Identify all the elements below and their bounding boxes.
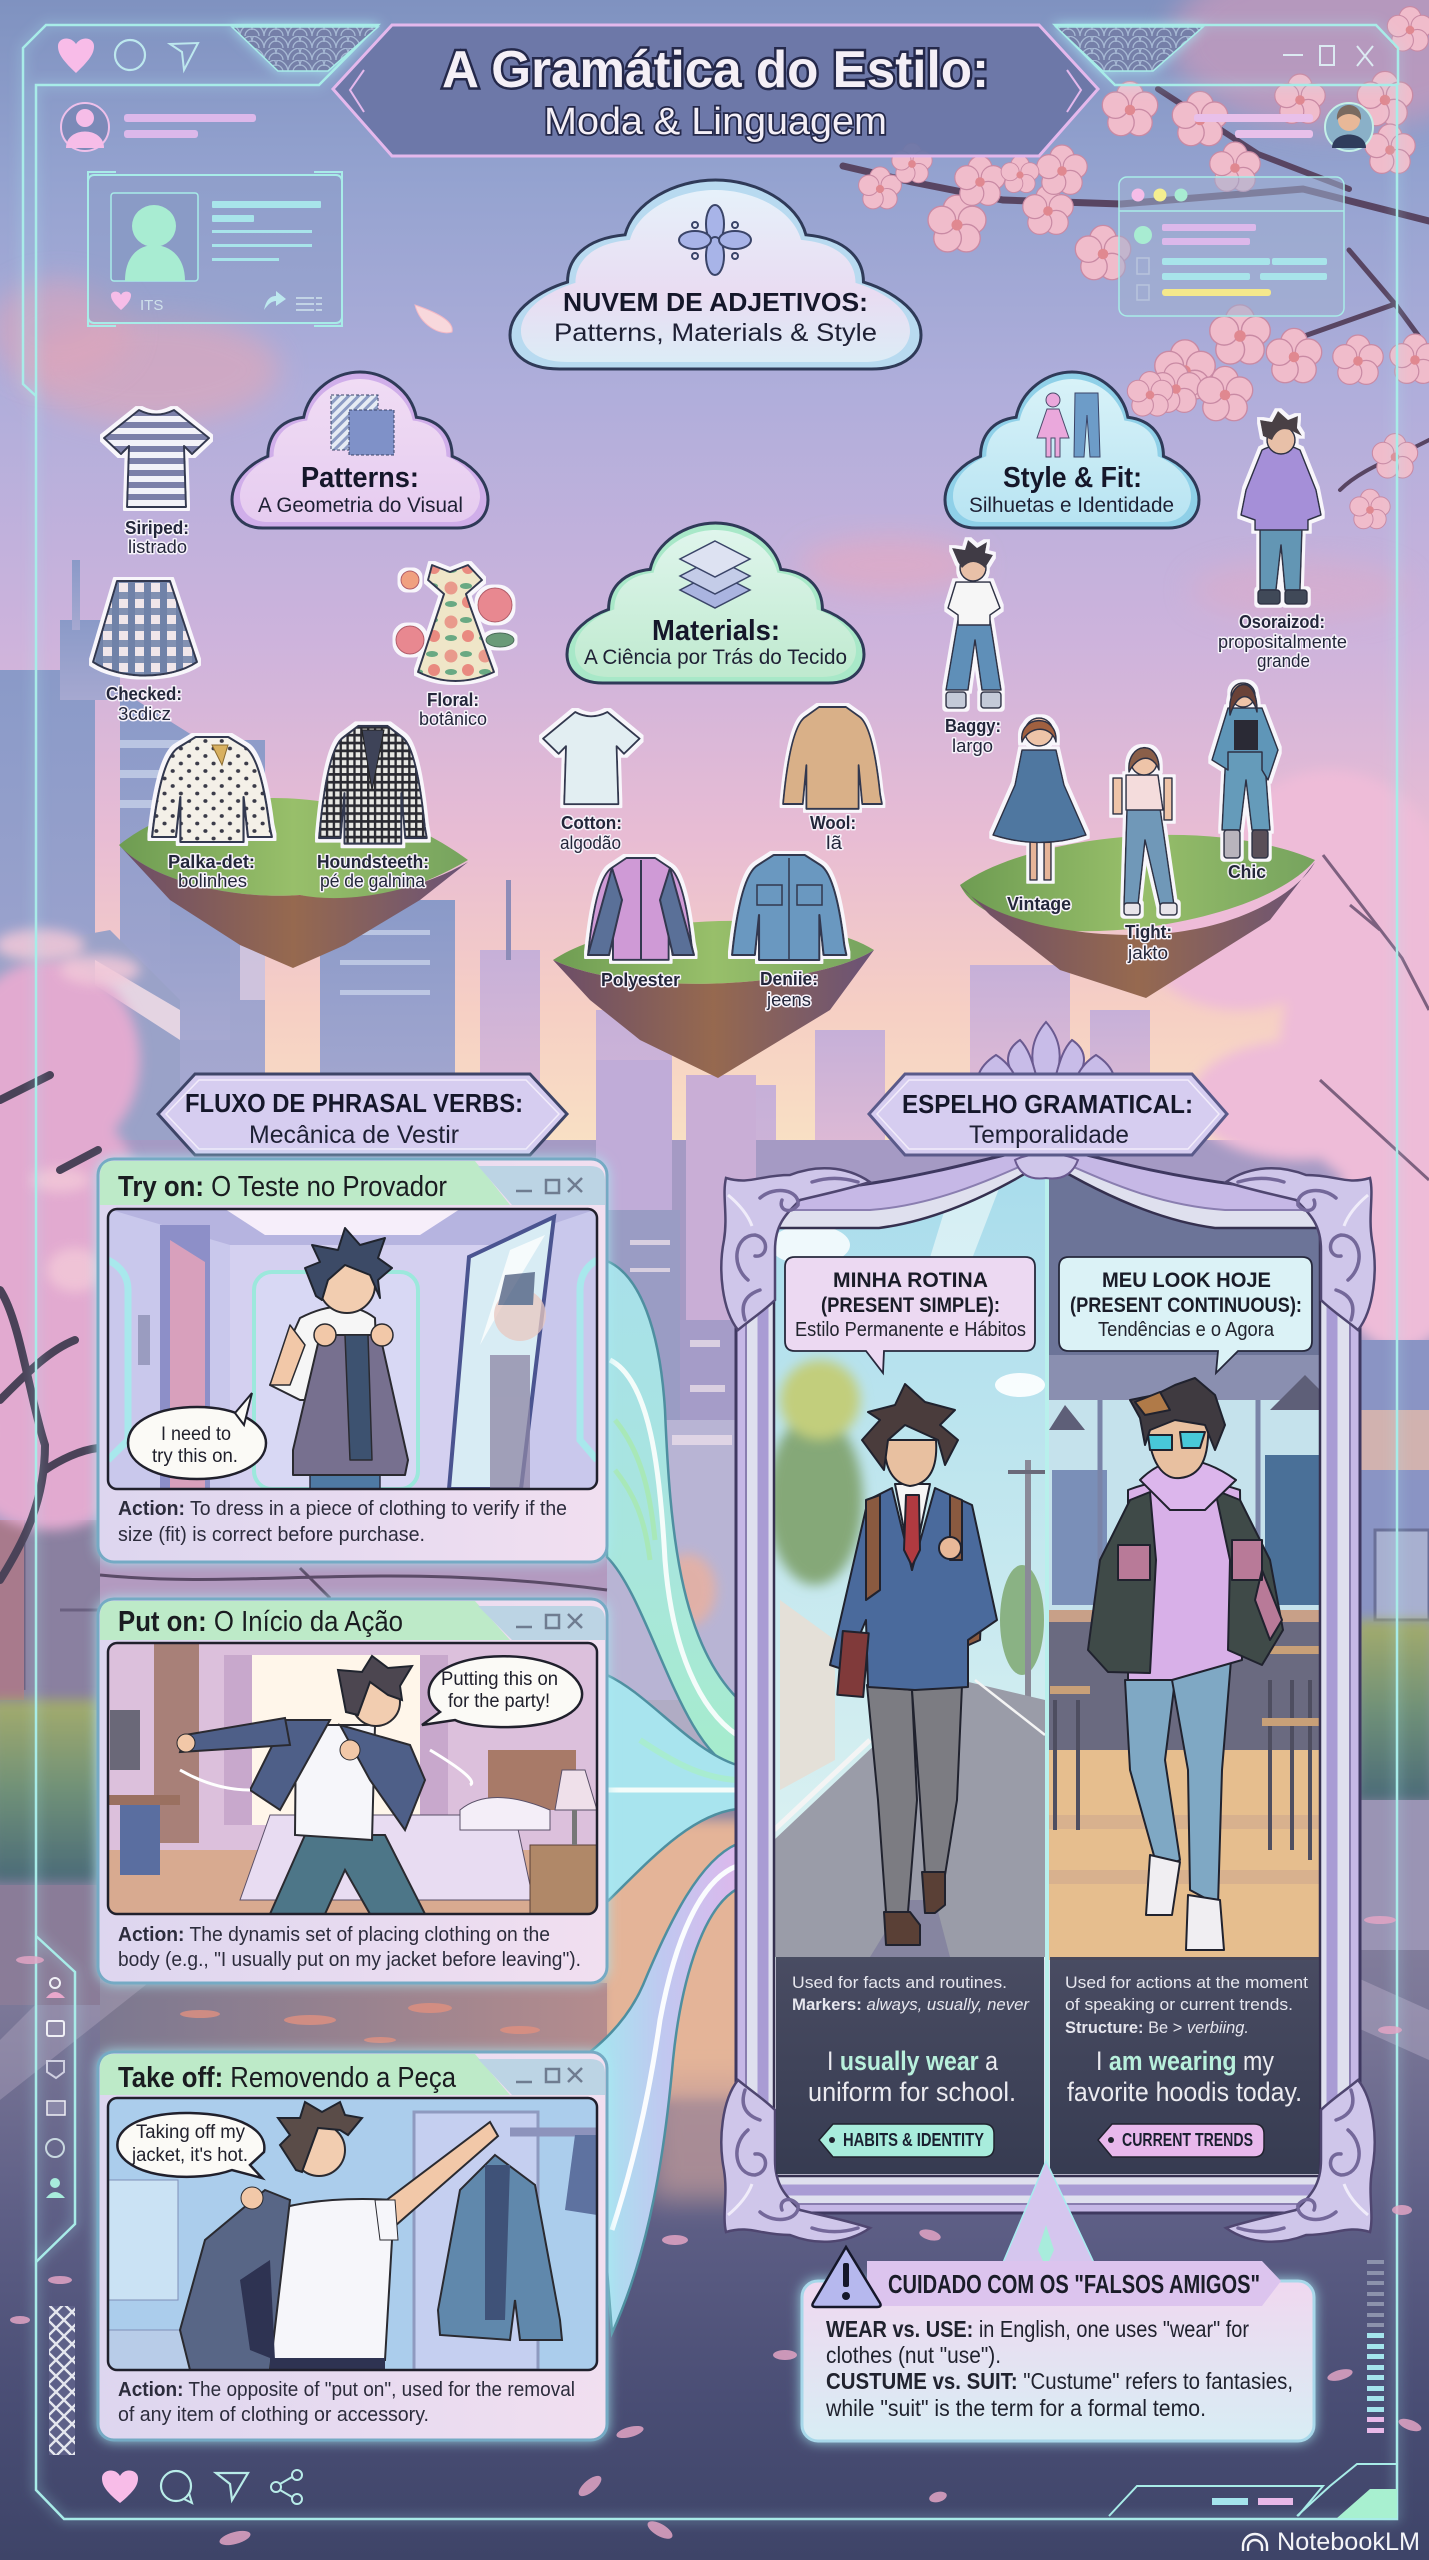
mirror body — [736, 1145, 1360, 2213]
near city left — [0, 560, 455, 1170]
figure: oversized: Osoraizod: — [1239, 612, 1325, 632]
figure: vintage — [993, 718, 1086, 914]
right cherry tree — [1150, 770, 1429, 1950]
character — [270, 1228, 408, 1490]
subtitle text: Moda & Linguagem — [544, 101, 887, 143]
panel: take off: Take off: Removendo a Peça — [118, 2062, 457, 2094]
figure: oversized: grande — [1257, 651, 1310, 671]
heading: fluxo de phrasal verbs: Mecânica de Vestir — [249, 1121, 459, 1149]
garment: striped tee — [104, 410, 209, 557]
panel: present continuous explanation: favorite hoodis today. — [1067, 2077, 1302, 2107]
garment: denim jacket: Deniie: — [760, 969, 818, 989]
bottom icons: heart, comment, send, share — [102, 2470, 302, 2504]
callout: minha rotina: Estilo Permanente e Hábitos — [795, 1319, 1026, 1341]
signal bar right — [1367, 2260, 1384, 2433]
figure: baggy — [945, 540, 1001, 756]
panel: put on: Put on: O Início da Ação — [118, 1606, 403, 1638]
garment: polka-dot blouse: bolinhes — [178, 871, 247, 891]
figure: tight: Tight: — [1125, 922, 1172, 942]
crest under heading — [1015, 1154, 1078, 1178]
panel: present continuous explanation: of speaking or current trends. — [1065, 1995, 1293, 2014]
garment: wool sweater — [783, 707, 882, 853]
character: trendy boy — [1088, 1378, 1283, 1950]
callout: meu look hoje: (PRESENT CONTINUOUS): — [1070, 1294, 1302, 1317]
garment: checked skirt: 3cdicz — [118, 704, 171, 724]
status widget right — [1119, 177, 1344, 316]
heading: fluxo de phrasal verbs — [158, 1074, 567, 1155]
left mirror scene: street — [767, 1160, 1046, 1960]
speech bubble — [422, 1656, 582, 1727]
garment: striped tee: listrado — [128, 537, 187, 557]
garment: wool sweater: Wool: — [810, 813, 856, 833]
garment: floral dress — [396, 565, 514, 729]
cloud: materials: Materials: — [652, 615, 780, 647]
panel: try on: Action: To dress in a piece of clothing to verify if the — [118, 1498, 567, 1520]
garment: cotton tee: algodão — [560, 833, 621, 853]
heading: espelho gramatical: Temporalidade — [969, 1121, 1129, 1149]
cloud: materials: A Ciência por Trás do Tecido — [584, 646, 847, 669]
panel: present continuous explanation: I am wearing my — [1096, 2046, 1274, 2076]
panel: put on: body (e.g., "I usually put on my jacket before leaving"). — [118, 1949, 581, 1971]
decorative pattern strip — [49, 2306, 75, 2455]
heading: espelho gramatical: ESPELHO GRAMATICAL: — [902, 1089, 1193, 1119]
speech bubble: Putting this on — [441, 1669, 558, 1690]
figure: vintage: Vintage — [1007, 894, 1071, 914]
cloud: style and fit — [945, 372, 1199, 528]
card widget left — [88, 172, 342, 326]
callout: minha rotina — [785, 1257, 1035, 1373]
speech bubble: for the party! — [448, 1691, 550, 1712]
left side tool strip — [36, 1936, 75, 2262]
avatar — [111, 193, 198, 281]
crown ornament — [978, 1022, 1114, 1076]
figure: tight: jakto — [1127, 943, 1168, 963]
cherry branch top right — [843, 7, 1429, 529]
cloud: patterns — [232, 372, 488, 528]
cloud: patterns: Patterns: — [301, 462, 419, 494]
character: school boy — [830, 1384, 997, 1945]
mirror frame — [721, 1022, 1375, 2242]
corner decoration bottom right — [1109, 2464, 1397, 2518]
warning panel: falsos amigos: CUIDADO COM OS "FALSOS AMIGOS" — [888, 2269, 1260, 2299]
title banner — [333, 25, 1098, 156]
garment: polka-dot blouse — [152, 737, 272, 891]
floating island: style — [960, 835, 1315, 998]
panel: take off — [98, 2052, 607, 2440]
tag: habits and identity — [819, 2124, 994, 2157]
callout: minha rotina: MINHA ROTINA — [833, 1269, 988, 1292]
speech bubble: jacket, it's hot. — [131, 2145, 248, 2166]
profile left — [61, 103, 256, 151]
divider — [1045, 1161, 1049, 2181]
heading: espelho gramatical — [869, 1074, 1227, 1155]
garment: cotton tee: Cotton: — [561, 813, 622, 833]
left cherry tree — [0, 929, 140, 2005]
corner ornaments — [721, 1168, 1375, 2242]
garment: polyester jacket — [588, 858, 694, 990]
hanging jacket — [438, 2155, 562, 2340]
cloud: nuvem de adjetivos: NUVEM DE ADJETIVOS: — [563, 287, 868, 317]
cloud: style and fit: Style & Fit: — [1003, 462, 1142, 494]
ribbon: try on — [607, 1261, 737, 1770]
warning panel: falsos amigos: CUSTUME vs. SUIT: "Custume" refers to fantasies, — [826, 2368, 1293, 2394]
tag: current trends: CURRENT TRENDS — [1122, 2130, 1253, 2150]
mid city — [0, 1140, 1429, 1800]
panel: present continuous explanation — [1050, 1957, 1319, 2174]
callout: meu look hoje: Tendências e o Agora — [1098, 1319, 1275, 1341]
window controls — [516, 1614, 582, 1628]
garment: floral dress: botânico — [419, 709, 487, 729]
figure: chic — [1212, 683, 1278, 882]
cloud: materials — [567, 523, 864, 683]
icon: swatches — [331, 395, 394, 455]
panel: take off: of any item of clothing or accessory. — [118, 2404, 429, 2426]
floating island: materials — [553, 921, 874, 1078]
warning panel: falsos amigos: clothes (nut "use"). — [826, 2342, 1001, 2368]
garment: striped tee: Siriped: — [125, 518, 189, 538]
petal — [415, 305, 452, 333]
petals scattered — [10, 1916, 1423, 2548]
panel: put on: Action: The dynamis set of placing clothing on the — [118, 1924, 550, 1946]
panel: try on: size (fit) is correct before purchase. — [118, 1524, 425, 1546]
cloud: style and fit: Silhuetas e Identidade — [969, 494, 1174, 517]
floating island: patterns — [119, 798, 468, 968]
warning panel: falsos amigos: while "suit" is the term for a formal temo. — [825, 2395, 1206, 2421]
cloud: nuvem de adjetivos — [510, 180, 921, 369]
garment: polka-dot blouse: Palka-det: — [168, 852, 255, 872]
garment: checked skirt — [93, 581, 197, 724]
panel: present simple explanation: Markers: always, usually, never — [792, 1995, 1030, 2014]
ribbon: put on — [607, 1675, 737, 1902]
figure: oversized: propositalmente — [1218, 632, 1347, 652]
icon: warning triangle — [812, 2247, 881, 2307]
speech bubble: try this on. — [152, 1446, 238, 1467]
garment: cotton tee — [543, 712, 640, 853]
window controls — [516, 1178, 582, 1193]
callout: meu look hoje: MEU LOOK HOJE — [1102, 1269, 1271, 1292]
tag: current trends — [1098, 2124, 1264, 2157]
reflection — [490, 1272, 546, 1489]
character — [180, 2102, 498, 2370]
card widget left: ITS — [140, 297, 163, 314]
garment: houndstooth blazer: Houndsteeth: — [317, 852, 429, 872]
panel: try on — [98, 1159, 607, 1562]
cloud: nuvem de adjetivos: Patterns, Materials & Style — [554, 319, 877, 347]
profile right — [1194, 103, 1373, 151]
speech bubble — [128, 1393, 266, 1479]
warning panel: falsos amigos: WEAR vs. USE: in English, one uses "wear" for — [826, 2316, 1249, 2342]
window controls — [516, 2068, 582, 2082]
panel: take off: Action: The opposite of "put on", used for the removal — [118, 2379, 575, 2401]
top-left seigaiha panel — [232, 27, 378, 71]
character — [177, 1656, 425, 1914]
flow ribbons — [590, 1261, 737, 2333]
top-right seigaiha panel — [1056, 27, 1203, 71]
window controls — [1283, 46, 1373, 66]
garment: houndstooth blazer — [317, 726, 429, 891]
scene: bathroom with hanger — [108, 2098, 597, 2372]
heading: fluxo de phrasal verbs: FLUXO DE PHRASAL VERBS: — [185, 1088, 523, 1118]
top icons: heart, search, send — [58, 38, 198, 73]
garment: wool sweater: lã — [826, 833, 843, 853]
cloud: patterns: A Geometria do Visual — [258, 494, 463, 517]
garment: houndstooth blazer: pé de galnina — [320, 871, 426, 891]
speech bubble: Taking off my — [136, 2122, 245, 2143]
ribbon: take off — [590, 1844, 737, 2333]
panel: put on — [98, 1599, 607, 1983]
card lines — [212, 201, 321, 261]
figure: tight — [1113, 748, 1177, 963]
panel: present simple explanation: uniform for school. — [808, 2077, 1016, 2107]
right mirror scene: cafe — [1049, 1160, 1340, 1960]
panel: present continuous explanation: Used for actions at the moment — [1065, 1973, 1308, 1992]
figure: oversized — [1218, 411, 1347, 671]
scene: bedroom — [108, 1643, 597, 1914]
far city — [480, 950, 1150, 1385]
NotebookLM logo: NotebookLM — [1277, 2528, 1420, 2556]
garment: checked skirt: Checked: — [106, 684, 182, 704]
title text: A Gramática do Estilo: — [442, 41, 989, 99]
panel: present simple explanation: I usually wear a — [827, 2046, 999, 2076]
figure: baggy: Baggy: — [945, 716, 1001, 736]
garment: denim jacket: jeens — [766, 990, 811, 1010]
figure: baggy: largo — [952, 736, 993, 756]
scene: fitting room — [108, 1209, 597, 1490]
icon: fabric stack — [680, 541, 750, 608]
icon: network — [679, 205, 751, 275]
panel: present simple explanation: Used for facts and routines. — [792, 1973, 1007, 1992]
garment: denim jacket — [732, 855, 846, 1010]
panel: present simple explanation — [776, 1957, 1044, 2174]
tag: habits and identity: HABITS & IDENTITY — [843, 2130, 984, 2150]
icon: figure and jeans — [1037, 393, 1100, 457]
warning panel: falsos amigos — [802, 2161, 1314, 2441]
side tool icons — [46, 1978, 65, 2198]
speech bubble: I need to — [161, 1424, 231, 1445]
callout: meu look hoje — [1059, 1257, 1312, 1373]
callout: minha rotina: (PRESENT SIMPLE): — [821, 1294, 1000, 1317]
garment: floral dress: Floral: — [427, 690, 479, 710]
panel: present continuous explanation: Structure: Be > verbiing. — [1065, 2018, 1249, 2037]
panel: try on: Try on: O Teste no Provador — [118, 1171, 447, 1203]
speech bubble — [117, 2113, 264, 2178]
garment: polyester jacket: Polyester — [601, 970, 680, 990]
figure: chic: Chic — [1228, 862, 1266, 882]
